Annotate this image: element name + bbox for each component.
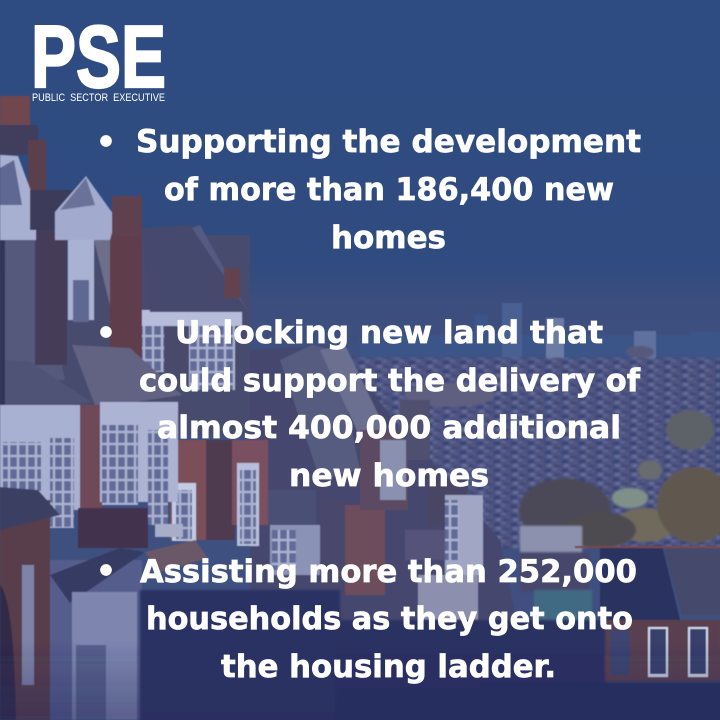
bullet point: new homes: Supporting the development (136, 124, 641, 160)
bullet point: households: households as they get onto (146, 601, 633, 637)
bullet point: new homes: of more than 186,400 new (164, 172, 614, 208)
logo: PSE Public Sector Executive: PSE (31, 7, 166, 106)
bullet point: households: Assisting more than 252,000 (140, 554, 637, 590)
bullet point: new land: new homes (289, 458, 489, 494)
bullet point: new homes (100, 124, 641, 256)
logo: PSE Public Sector Executive: PUBLIC SECTOR EXECUTIVE (32, 92, 165, 104)
bullet point: new land: could support the delivery of (139, 363, 640, 399)
bullet point: households: the housing ladder. (221, 649, 556, 685)
left house: upper roofs and gables (0, 235, 250, 435)
background photo: distant skyline (360, 303, 720, 366)
bullet point: households (100, 554, 637, 685)
bullet point: new land: Unlocking new land that (175, 315, 603, 351)
gables and chimneys at top (0, 96, 30, 126)
bullet point: new land: almost 400,000 additional (157, 410, 621, 446)
bay windows lower left (0, 405, 90, 510)
bullet point: new homes: homes (331, 220, 446, 256)
background photo: dark foreground trees (0, 590, 720, 720)
far houses in the row (250, 345, 520, 640)
bullet point: new land (100, 315, 640, 494)
background photo: hillside city of houses (340, 346, 720, 640)
background photo: foreground house lower right (575, 545, 720, 682)
background photo: terrace of houses (0, 96, 520, 720)
